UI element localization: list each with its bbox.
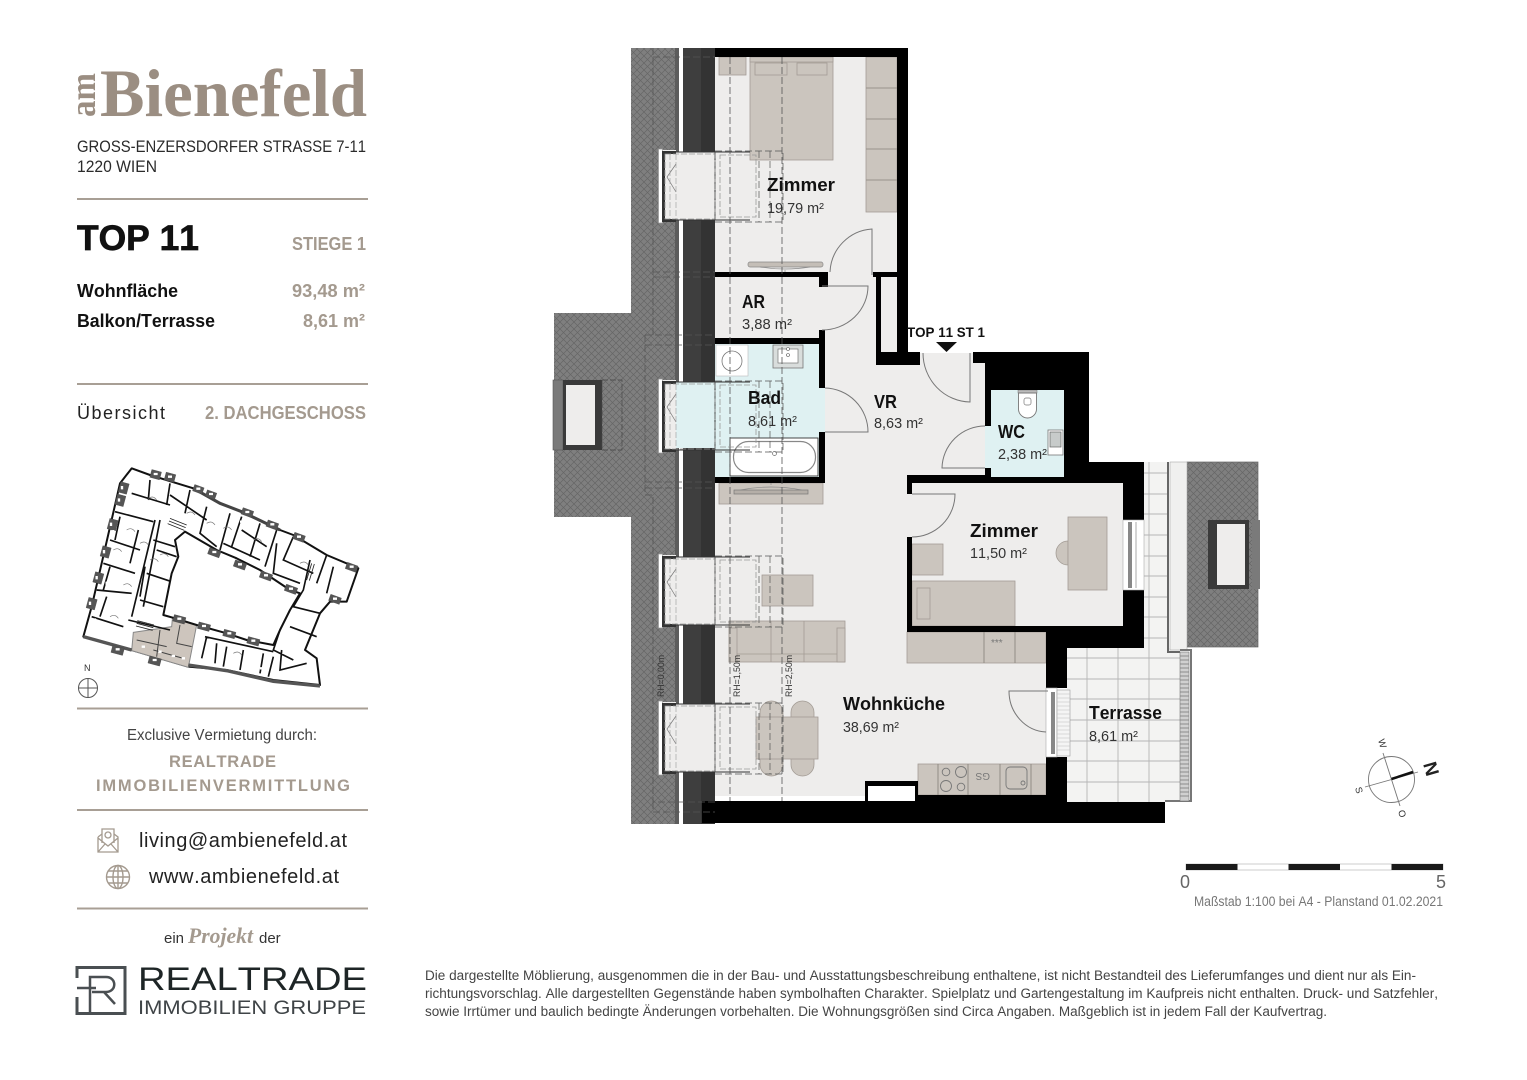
room label: WC	[998, 422, 1047, 463]
furniture: bathroom	[716, 345, 818, 476]
highlighted apartment	[132, 616, 197, 667]
roof edge strip	[675, 48, 715, 824]
address: GROSS-ENZERSDORFER STRASSE 7-11	[77, 138, 366, 156]
disclaimer: richtungsvorschlag. Alle dargestellten Gegenstände haben symbolhaften Charakter. Spielplatz und Gartengestaltung im Kaufpreis nicht enthalten. Druck- und Satzfehler,	[425, 986, 1438, 1001]
room label: Bad: Bad	[748, 388, 781, 408]
room label: Terrasse	[1089, 703, 1162, 745]
floor overview heading: 2. DACHGESCHOSS	[205, 403, 366, 423]
rental agency: REALTRADE	[169, 753, 276, 771]
terrace tiles	[1067, 462, 1187, 802]
address	[77, 138, 366, 176]
furniture: TV sideboard	[719, 483, 823, 504]
compass: O	[1395, 809, 1408, 819]
area table	[77, 280, 365, 331]
room label: VR	[874, 392, 923, 432]
terrace railing	[1165, 650, 1191, 801]
room label: Terrasse: Terrasse	[1089, 703, 1162, 723]
height labels: RH=1,50m	[732, 655, 743, 697]
utility niche	[868, 786, 915, 801]
shaft	[991, 363, 1068, 384]
floor overview heading: Übersicht	[77, 403, 165, 423]
dormer left	[553, 380, 622, 450]
room label: WC: WC	[998, 422, 1025, 442]
heading: TOP 11	[77, 219, 366, 258]
room: WC floor	[985, 390, 1064, 477]
compass: S	[1352, 786, 1364, 795]
room label: Zimmer: Zimmer	[767, 175, 835, 195]
compass: W	[1375, 738, 1388, 749]
window: kitchen door	[1046, 688, 1070, 757]
room label: Zimmer 2	[970, 521, 1038, 562]
logo: am Bienefeld: am	[63, 73, 103, 117]
rental agency: IMMOBILIENVERMITTLUNG	[96, 777, 350, 795]
area table: Balkon/Terrasse	[77, 310, 215, 331]
window: Zimmer 2	[1123, 520, 1144, 590]
furniture: Zimmer 2	[912, 517, 1107, 626]
dashed roof height lines	[645, 48, 782, 812]
scale bar: Maßstab 1:100 bei A4 - Planstand 01.02.2021	[1194, 894, 1443, 909]
north marker: N	[84, 663, 90, 673]
dormer right	[1208, 520, 1260, 589]
roof hatch	[554, 48, 678, 824]
room label: Wohnküche: 38,69 m²	[843, 720, 899, 736]
room label: WC: 2,38 m²	[998, 447, 1047, 463]
logo: Realtrade: REALTRADE	[138, 961, 367, 997]
heading: TOP 11: STIEGE 1	[292, 234, 366, 254]
furniture: living and dining	[729, 575, 845, 776]
disclaimer: Die dargestellte Möblierung, ausgenommen die in der Bau- und Ausstattungsbeschreibung enthaltene, ist nicht Bestandteil des Lieferumfanges und dient nur als Ein-	[425, 968, 1416, 983]
height labels: RH=0,00m	[656, 655, 667, 697]
furniture: bedroom	[719, 57, 897, 272]
rental agency	[96, 727, 350, 795]
disclaimer: sowie Irrtümer und baulich bedingte Änderungen vorbehalten. Die Wohnungsgrößen sind Circa Angaben. Maßgeblich ist in jedem Fall der Kaufvertrag.	[425, 1004, 1327, 1019]
rental agency: Exclusive Vermietung durch:	[127, 727, 317, 744]
north marker	[78, 663, 98, 698]
room: Zimmer 2 floor	[907, 483, 1123, 626]
room label: AR	[742, 292, 792, 333]
floor area	[715, 57, 1046, 796]
area table: Wohnfläche	[77, 280, 178, 301]
doors	[822, 229, 1048, 732]
room label: AR: AR	[742, 292, 765, 312]
room label: Bad: 8,61 m²	[748, 414, 797, 430]
compass	[1352, 738, 1442, 819]
overview mini floor plan	[83, 468, 358, 686]
room label: Bad	[748, 388, 797, 430]
logo: Realtrade	[77, 961, 367, 1019]
project credit	[164, 923, 281, 948]
room label: Zimmer 2: Zimmer	[970, 521, 1038, 541]
room label: Zimmer	[767, 175, 835, 217]
address: 1220 WIEN	[77, 158, 157, 176]
project credit: ein	[164, 930, 184, 947]
scale bar	[1180, 864, 1446, 909]
roof windows	[658, 149, 783, 775]
floor overview heading	[77, 403, 366, 423]
logo: am Bienefeld: Bienefeld	[100, 55, 367, 131]
project credit: Projekt	[187, 923, 254, 948]
furniture: WC	[1018, 390, 1063, 455]
skylight floor fills	[676, 152, 715, 772]
furniture: kitchen: GS	[975, 770, 990, 781]
floor plan	[553, 48, 1260, 824]
skylight teal fill	[676, 382, 715, 448]
furniture: kitchen	[907, 632, 1046, 795]
area table: 93,48 m²	[292, 280, 365, 301]
disclaimer	[425, 968, 1438, 1019]
heading: TOP 11: TOP 11	[77, 219, 199, 258]
entrance label	[907, 324, 985, 352]
website: www.ambienefeld.at	[148, 866, 339, 888]
room label: Wohnküche	[843, 694, 945, 736]
compass: N	[1418, 760, 1442, 779]
scale bar: 5	[1436, 872, 1446, 892]
icon: globe	[106, 866, 130, 888]
room label: Zimmer 2: 11,50 m²	[970, 546, 1027, 562]
height labels	[656, 655, 795, 697]
email: living@ambienefeld.at	[139, 830, 347, 852]
room label: Zimmer: 19,79 m²	[767, 201, 824, 217]
room: Bad floor	[715, 344, 825, 477]
height labels: RH=2,50m	[784, 655, 795, 697]
right roof hatch	[1187, 462, 1258, 647]
furniture: kitchen: ***	[991, 638, 1003, 649]
room label: Terrasse: 8,61 m²	[1089, 729, 1138, 745]
scale bar: 0	[1180, 872, 1190, 892]
logo: Realtrade: IMMOBILIEN GRUPPE	[138, 998, 366, 1019]
project credit: der	[259, 930, 281, 947]
room label: VR: VR	[874, 392, 897, 412]
room label: VR: 8,63 m²	[874, 416, 923, 432]
panel: project sidebar	[63, 55, 368, 1019]
entrance label: TOP 11 ST 1	[907, 324, 985, 340]
room label: AR: 3,88 m²	[742, 317, 792, 333]
walls	[702, 48, 1165, 823]
icon: envelope	[98, 829, 118, 852]
room label: Wohnküche: Wohnküche	[843, 694, 945, 714]
area table: 8,61 m²	[303, 310, 365, 331]
